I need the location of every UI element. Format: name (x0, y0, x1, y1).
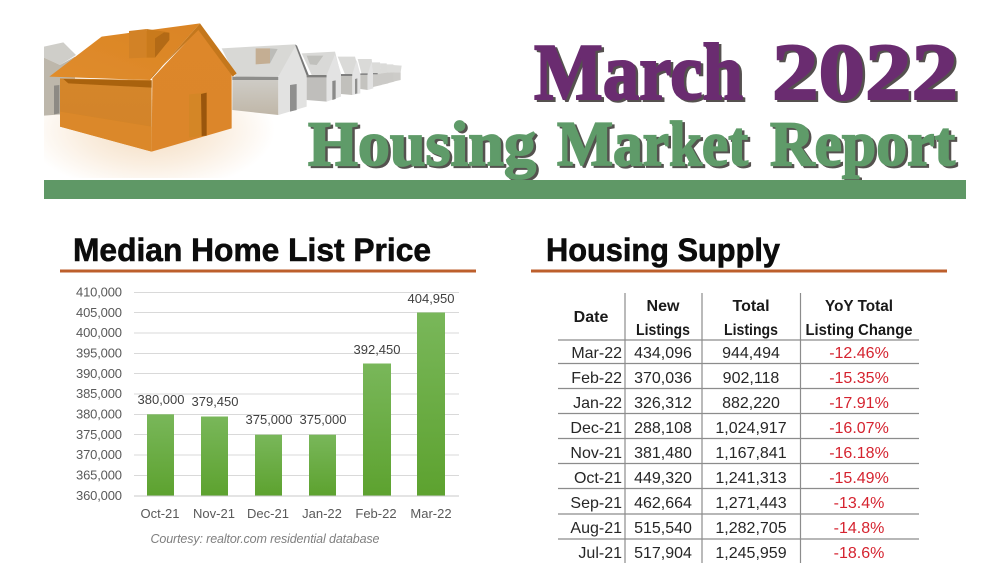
date column: Aug-21 (570, 520, 622, 537)
table header: YoY Total (825, 298, 893, 315)
date column: Feb-22 (571, 370, 622, 387)
grey house 7 (387, 64, 394, 83)
yoy change column: -17.91% (829, 395, 889, 412)
date column: Nov-21 (570, 445, 622, 462)
total listings column (715, 345, 787, 562)
illustration: row of houses with orange house in front (44, 23, 402, 178)
grey house 8 (394, 65, 402, 82)
panel: housing supply (531, 232, 947, 563)
y axis labels: 370,000 (76, 447, 122, 462)
grey house 3 (338, 57, 360, 95)
y axis labels: 395,000 (76, 346, 122, 360)
date column: Jan-22 (573, 395, 622, 412)
total listings column: 1,271,443 (715, 495, 787, 512)
new listings column: 381,480 (634, 445, 692, 462)
x axis labels: Jan-22 (302, 506, 342, 521)
title: March 2022: 2022 (772, 29, 958, 117)
x axis labels: Nov-21 (193, 506, 235, 521)
grey house 4 (358, 59, 373, 90)
total listings column: 1,241,313 (715, 470, 787, 487)
x axis labels: Feb-22 (355, 506, 397, 521)
orange house (49, 23, 237, 152)
new listings column: 517,904 (634, 545, 692, 562)
yoy change column: -15.49% (829, 470, 889, 487)
y axis labels: 385,000 (76, 386, 122, 401)
x axis labels (140, 506, 452, 521)
y axis labels: 400,000 (76, 325, 122, 340)
y axis labels: 365,000 (76, 468, 122, 482)
date column: Oct-21 (574, 470, 622, 487)
y axis labels: 390,000 (76, 366, 122, 381)
new listings column (634, 345, 692, 562)
yoy change column: -15.35% (829, 370, 889, 387)
bar value labels: 404,950 (408, 291, 454, 306)
date column: Mar-22 (571, 345, 622, 362)
new listings column: 326,312 (634, 395, 692, 412)
heading: Median Home List Price: Median Home List Price (73, 232, 431, 268)
grey house 1 (222, 44, 309, 115)
y axis labels: 360,000 (76, 488, 122, 503)
y axis labels: 375,000 (76, 427, 122, 442)
title: March 2022: 2022 (774, 31, 960, 119)
new listings column: 462,664 (634, 495, 692, 512)
heading underline (531, 270, 947, 272)
new listings column: 434,096 (634, 345, 692, 362)
x axis labels: Dec-21 (247, 506, 289, 521)
far left grey house (44, 42, 76, 116)
heading underline (60, 270, 476, 272)
table header: Date (574, 309, 608, 326)
new listings column: 449,320 (634, 470, 692, 487)
date column: Jul-21 (578, 545, 622, 562)
table header: Listing Change (806, 322, 913, 339)
total listings column: 1,282,705 (715, 520, 787, 537)
y axis labels (76, 284, 122, 503)
green banner bar (44, 180, 966, 199)
source note: Courtesy: realtor.com residential database (150, 532, 380, 546)
total listings column: 1,245,959 (715, 545, 787, 562)
title: Housing Market Report: Report (770, 108, 956, 179)
date column: Dec-21 (570, 420, 622, 437)
table header (574, 298, 913, 339)
title: Housing Market Report: Report (772, 110, 958, 181)
yoy change column: -16.18% (829, 445, 889, 462)
date column (570, 345, 622, 562)
title: Housing Market Report: Housing (310, 110, 538, 181)
table header: Total (732, 298, 770, 315)
y axis labels: 380,000 (76, 406, 122, 422)
yoy change column: -16.07% (829, 420, 889, 437)
title: March 2022: March (536, 31, 746, 119)
title: March 2022: March (534, 29, 743, 117)
total listings column: 1,024,917 (715, 420, 787, 437)
yoy change column: -12.46% (829, 345, 889, 362)
bars (147, 312, 445, 496)
total listings column: 882,220 (722, 395, 780, 412)
grey house 5 (372, 62, 382, 87)
y axis labels: 405,000 (76, 305, 122, 320)
new listings column: 515,540 (634, 520, 692, 537)
title: March 2022 (534, 29, 960, 119)
panel: header banner (44, 23, 966, 199)
new listings column: 370,036 (634, 370, 692, 387)
table header: Listings (724, 322, 778, 339)
total listings column: 902,118 (723, 370, 779, 387)
yoy change column: -14.8% (834, 520, 884, 537)
yoy change column (829, 345, 889, 562)
bar value labels: 392,450 (354, 342, 400, 357)
new listings column: 288,108 (634, 420, 692, 437)
date column: Sep-21 (570, 495, 622, 512)
total listings column: 944,494 (722, 345, 780, 362)
y axis labels: 410,000 (76, 284, 122, 300)
grey houses receding (222, 44, 402, 115)
yoy change column: -18.6% (834, 545, 884, 562)
bar value labels: 379,450 (192, 394, 238, 409)
table: listings (558, 293, 919, 563)
x axis labels: Mar-22 (410, 506, 452, 521)
yoy change column: -13.4% (834, 495, 884, 512)
bar value labels: 375,000 (246, 412, 292, 427)
bar value labels: 380,000 (138, 392, 184, 407)
grey house 2 (302, 52, 341, 102)
x axis labels: Oct-21 (140, 506, 180, 521)
bar value labels: 375,000 (300, 412, 346, 427)
grey house 6 (380, 63, 388, 85)
table header: New (647, 298, 680, 315)
title: Housing Market Report (308, 108, 958, 181)
heading: Housing Supply: Housing Supply (546, 232, 780, 268)
table header: Listings (636, 322, 690, 339)
title: Housing Market Report: Market (560, 110, 751, 181)
title: Housing Market Report: Market (557, 108, 749, 179)
bar chart (76, 284, 459, 521)
bar value labels (138, 291, 454, 427)
total listings column: 1,167,841 (715, 445, 787, 462)
title: Housing Market Report: Housing (308, 108, 536, 179)
panel: median home list price (60, 232, 476, 546)
